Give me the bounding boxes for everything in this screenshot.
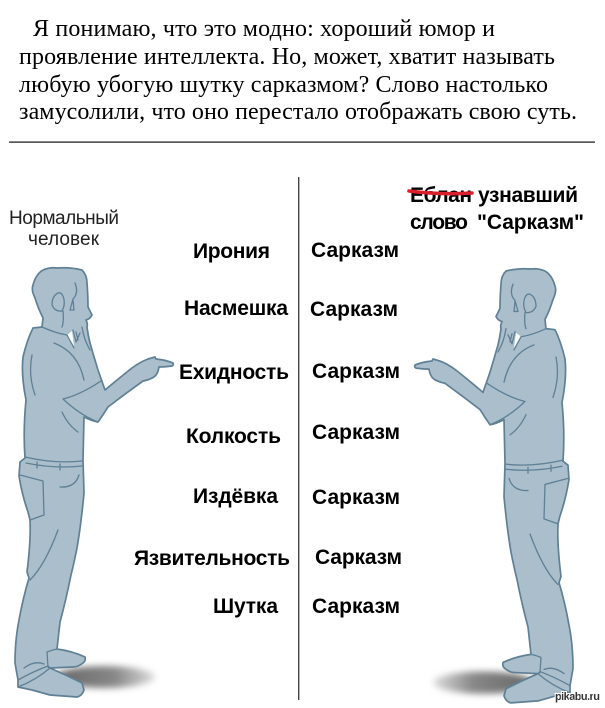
word 7: Сарказм — [312, 595, 400, 618]
term: mockery: Насмешка — [184, 297, 288, 320]
word 6: Сарказм — [315, 546, 402, 569]
term: barb: Колкость — [186, 425, 281, 448]
word 1: Сарказм — [311, 239, 399, 262]
term: joke: Шутка — [213, 595, 278, 618]
title text block: любую убогую шутку сарказмом? Слово настолько — [19, 72, 548, 98]
word 4: Сарказм — [312, 421, 400, 444]
term: causticity: Язвительность — [134, 547, 290, 570]
label: normal person: человек — [28, 229, 100, 250]
heading: right figure label: узнавший — [478, 184, 578, 207]
term: irony: Ирония — [193, 240, 270, 263]
word 3: Сарказм — [312, 360, 400, 383]
heading: right figure label — [409, 184, 584, 234]
left column of terms — [134, 240, 290, 618]
title text block: Я понимаю, что это модно: хороший юмор и — [33, 16, 495, 42]
horizontal divider — [9, 142, 595, 143]
label: normal person: Нормальный — [9, 208, 119, 229]
word 5: Сарказм — [312, 486, 400, 509]
term: taunt: Издёвка — [193, 485, 278, 508]
heading: right figure label: Еблан — [410, 184, 472, 207]
watermark: pikabu.ru — [555, 691, 600, 703]
title text block: замусолили, что оно перестало отображать свою суть. — [19, 99, 577, 125]
figure: left man pointing — [15, 268, 173, 697]
word 2: Сарказм — [310, 298, 398, 321]
heading: right figure label: "Сарказм" — [477, 211, 584, 234]
right column of repeated word — [310, 239, 402, 618]
white collar — [67, 331, 74, 346]
figure: right man pointing — [415, 269, 573, 703]
title text block: проявление интеллекта. Но, может, хватит называть — [19, 44, 555, 70]
term: snark: Ехидность — [179, 361, 289, 384]
label: normal person — [9, 208, 119, 250]
heading: right figure label: слово — [410, 211, 468, 234]
white collar — [514, 333, 521, 348]
red strikethrough — [409, 191, 472, 194]
title text block — [19, 16, 577, 125]
vertical center divider — [298, 177, 299, 700]
